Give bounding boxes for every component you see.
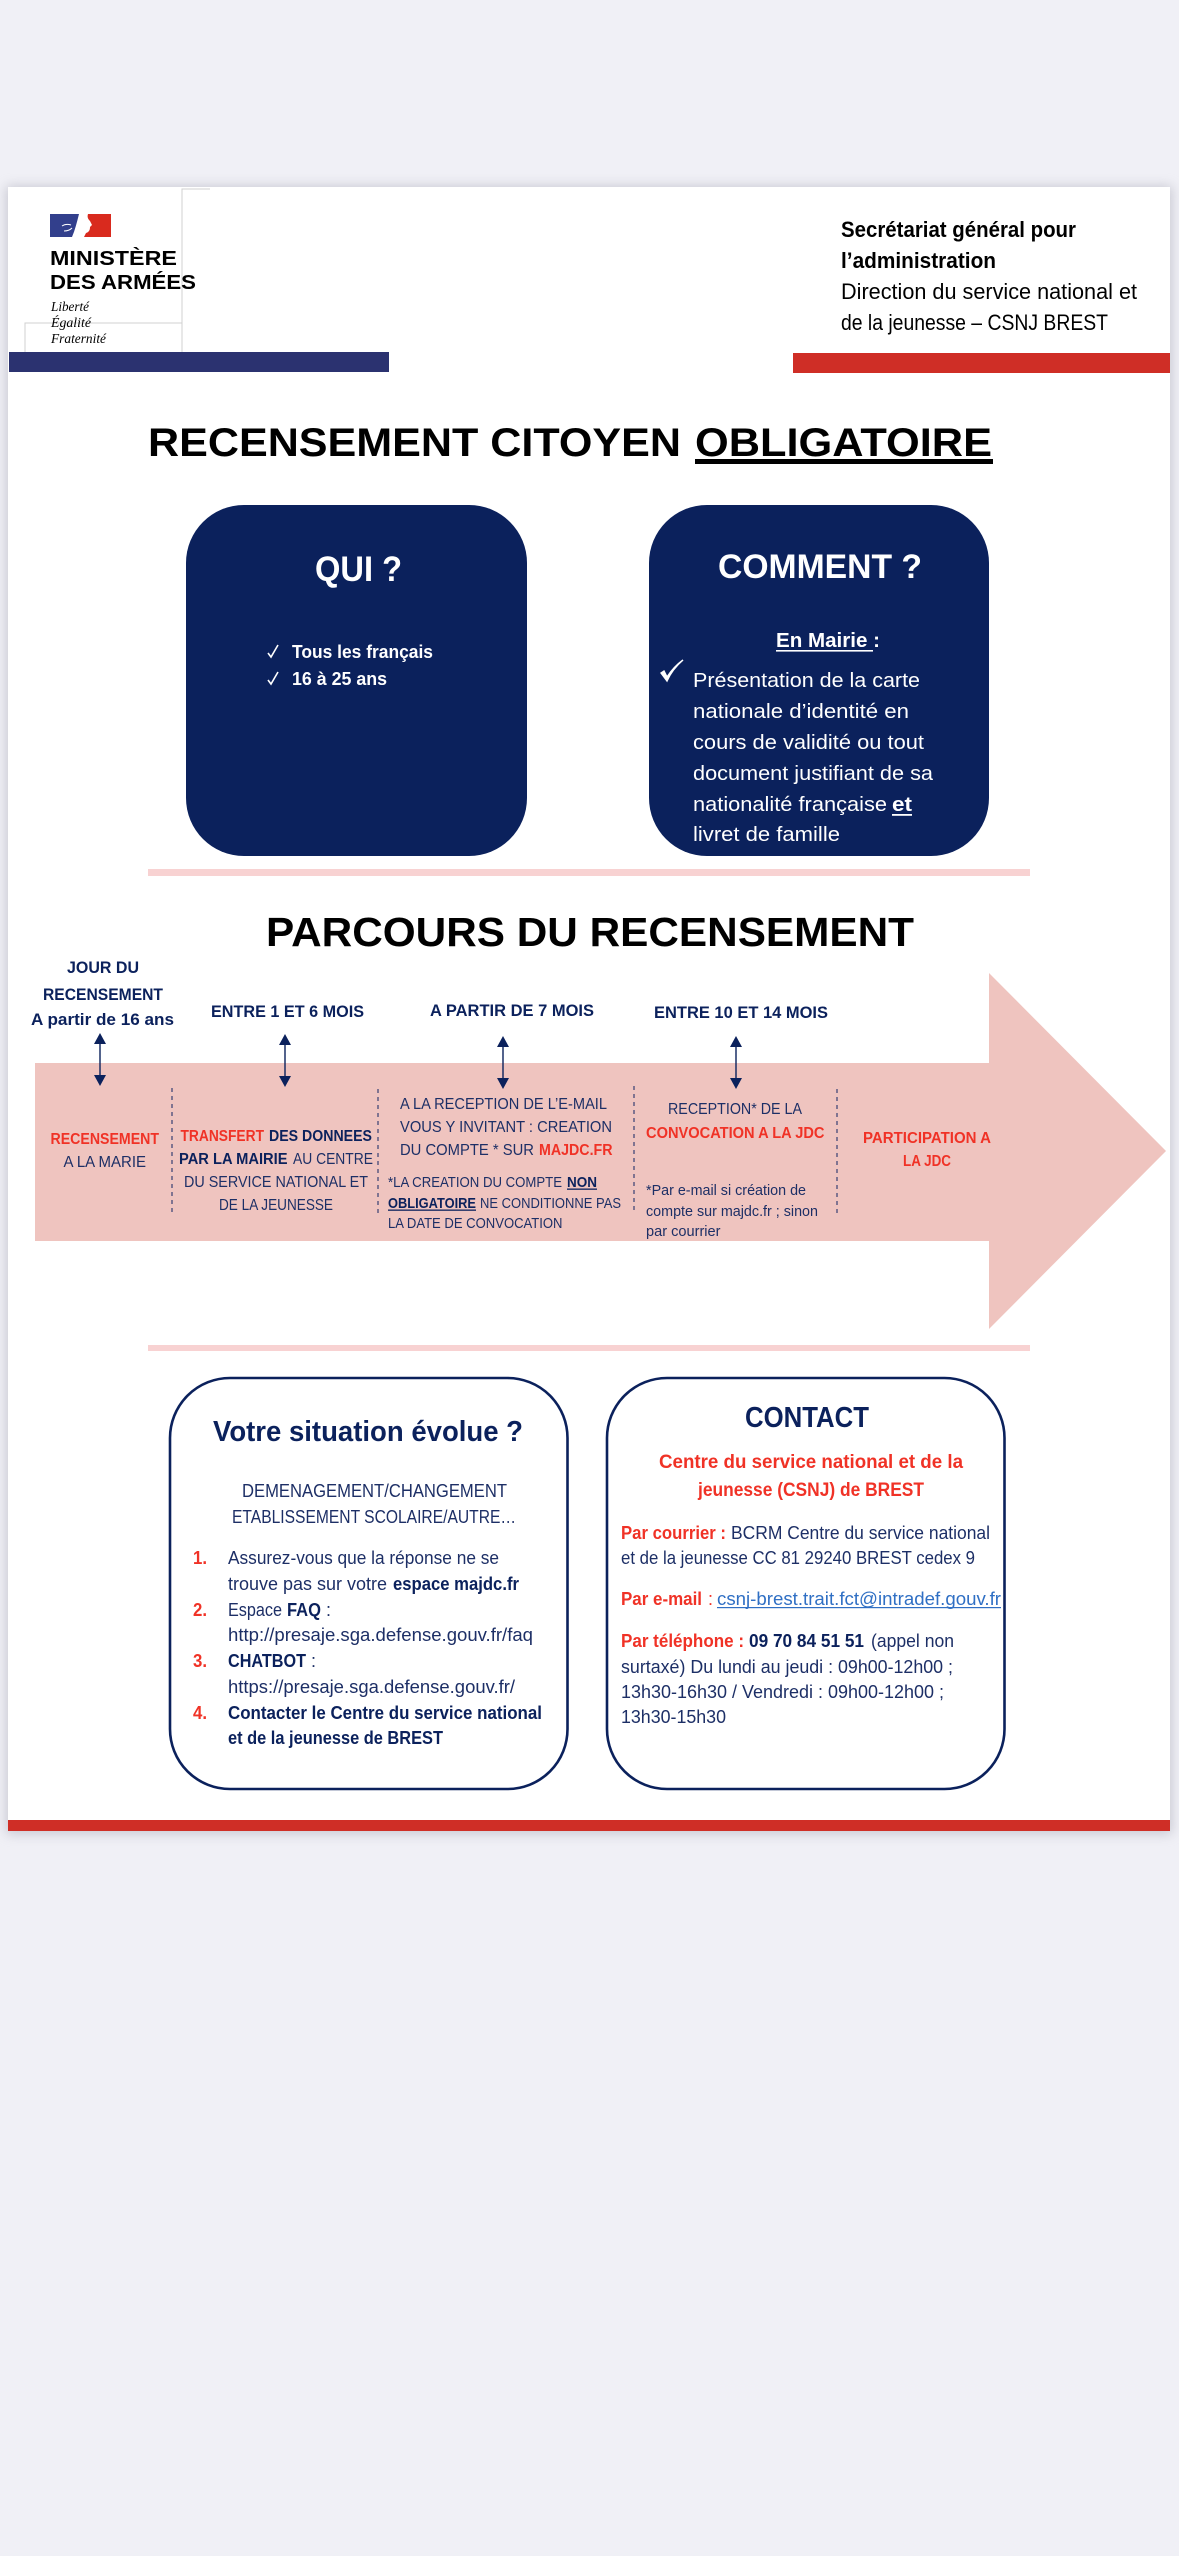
logo: Ministère des Armées bbox=[50, 214, 196, 347]
step 4: reception de la convocation: *Par e-mail si création de bbox=[646, 1182, 806, 1199]
text: par telephone bbox=[621, 1631, 954, 1727]
logo: Ministère des Armées: Égalité bbox=[50, 314, 92, 331]
header text: issuing service: Direction du service national et bbox=[841, 279, 1137, 304]
list: steps: https://presaje.sga.defense.gouv.fr/ bbox=[228, 1677, 515, 1697]
double arrow 3 bbox=[497, 1036, 509, 1089]
header bar: red bbox=[793, 353, 1170, 373]
step 4: reception de la convocation: CONVOCATION A LA JDC bbox=[646, 1125, 825, 1142]
timeline label: entre 10 et 14 mois: ENTRE 10 ET 14 MOIS bbox=[654, 1003, 828, 1022]
step 3: creation du compte bbox=[388, 1096, 621, 1232]
step 3: creation du compte: *LA CREATION DU COMPTE bbox=[388, 1174, 562, 1191]
timeline label: jour du recensement: A partir de 16 ans bbox=[31, 1010, 174, 1029]
text: required documents: et bbox=[892, 794, 912, 816]
list: steps: espace majdc.fr bbox=[393, 1574, 519, 1594]
heading: COMMENT: COMMENT ? bbox=[718, 548, 922, 586]
header text: issuing service bbox=[841, 217, 1137, 335]
panel: contact bbox=[607, 1378, 1004, 1789]
list: who: 16 à 25 ans bbox=[292, 669, 387, 689]
footer bar: red bbox=[8, 1820, 1170, 1831]
text: required documents: Présentation de la carte bbox=[693, 670, 920, 692]
panel: COMMENT bbox=[649, 505, 989, 856]
step 2: transfert des donnees bbox=[179, 1128, 373, 1214]
step 2: transfert des donnees: DES DONNEES bbox=[269, 1128, 372, 1145]
timeline label: a partir de 7 mois: A PARTIR DE 7 MOIS bbox=[430, 1001, 594, 1020]
step 4: reception de la convocation: par courrier bbox=[646, 1223, 720, 1240]
subheading: CSNJ de Brest: Centre du service national et de la bbox=[659, 1452, 963, 1473]
step 3: creation du compte: DU COMPTE * SUR bbox=[400, 1142, 534, 1159]
step 2: transfert des donnees: TRANSFERT bbox=[180, 1128, 264, 1145]
list: steps: Contacter le Centre du service national bbox=[228, 1703, 542, 1723]
text: situations: DEMENAGEMENT/CHANGEMENT bbox=[242, 1481, 507, 1501]
text: par courrier: BCRM Centre du service national bbox=[731, 1523, 990, 1543]
list: steps: 2. bbox=[193, 1600, 207, 1620]
title: OBLIGATOIRE bbox=[695, 421, 992, 465]
text: required documents: nationale d’identité en bbox=[693, 701, 909, 723]
step 5: participation a la JDC bbox=[863, 1130, 991, 1170]
step 3: creation du compte: NON bbox=[567, 1174, 597, 1191]
heading: votre situation evolue: Votre situation évolue ? bbox=[213, 1416, 523, 1448]
step 4: reception de la convocation: compte sur majdc.fr ; sinon bbox=[646, 1203, 818, 1220]
text: par telephone: 09 70 84 51 51 bbox=[749, 1631, 864, 1651]
text: par telephone: 13h30-15h30 bbox=[621, 1707, 726, 1727]
list: who: Tous les français bbox=[292, 642, 433, 662]
step 3: creation du compte: OBLIGATOIRE bbox=[388, 1195, 476, 1212]
list: steps: trouve pas sur votre bbox=[228, 1574, 387, 1594]
text: par telephone: surtaxé) Du lundi au jeudi : 09h00-12h00 ; bbox=[621, 1657, 953, 1677]
logo: Ministère des Armées: Liberté bbox=[50, 300, 90, 315]
text: par e-mail: Par e-mail bbox=[621, 1589, 702, 1609]
double arrow 2 bbox=[279, 1034, 291, 1087]
step 2: transfert des donnees: AU CENTRE bbox=[293, 1151, 373, 1168]
step 3: creation du compte: LA DATE DE CONVOCATION bbox=[388, 1215, 562, 1232]
step 1: recensement bbox=[50, 1131, 159, 1171]
heading: contact: CONTACT bbox=[745, 1402, 869, 1434]
arrow: timeline background bbox=[35, 973, 1166, 1329]
heading: Parcours du recensement: PARCOURS DU RECENSEMENT bbox=[266, 909, 914, 955]
list: steps: CHATBOT bbox=[228, 1651, 306, 1671]
logo: Ministère des Armées: Fraternité bbox=[50, 332, 107, 347]
list: steps: 4. bbox=[193, 1703, 207, 1723]
text: required documents: livret de famille bbox=[693, 824, 840, 846]
title: RECENSEMENT CITOYEN bbox=[148, 421, 681, 465]
list: steps bbox=[193, 1548, 542, 1748]
list: who bbox=[268, 642, 433, 689]
double arrow 1 bbox=[94, 1033, 106, 1086]
text: required documents: nationalité française bbox=[693, 794, 887, 816]
step 3: creation du compte: NE CONDITIONNE PAS bbox=[480, 1195, 621, 1212]
step 4: reception de la convocation bbox=[646, 1101, 825, 1240]
heading: QUI: QUI ? bbox=[315, 550, 402, 589]
double arrow 4 bbox=[730, 1036, 742, 1089]
text: par courrier: et de la jeunesse CC 81 29240 BREST cedex 9 bbox=[621, 1548, 975, 1568]
step 1: recensement: A LA MARIE bbox=[64, 1154, 146, 1171]
text: par e-mail: : bbox=[708, 1589, 713, 1609]
header bar: blue bbox=[9, 352, 389, 372]
text: situations: ETABLISSEMENT SCOLAIRE/AUTRE… bbox=[232, 1507, 516, 1527]
step 2: transfert des donnees: DE LA JEUNESSE bbox=[219, 1197, 333, 1214]
list: steps: et de la jeunesse de BREST bbox=[228, 1728, 443, 1748]
step 3: creation du compte: MAJDC.FR bbox=[539, 1142, 613, 1159]
text: par courrier: Par courrier : bbox=[621, 1523, 726, 1543]
step 3: creation du compte: VOUS Y INVITANT : CREATION bbox=[400, 1119, 612, 1136]
text: par telephone: 13h30-16h30 / Vendredi : 09h00-12h00 ; bbox=[621, 1682, 944, 1702]
text: par courrier bbox=[621, 1523, 990, 1568]
step 5: participation a la JDC: PARTICIPATION A bbox=[863, 1130, 991, 1147]
subheading: En Mairie: En Mairie : bbox=[776, 630, 880, 652]
header text: issuing service: de la jeunesse – CSNJ BREST bbox=[841, 310, 1108, 335]
header text: issuing service: Secrétariat général pour bbox=[841, 217, 1076, 242]
text: required documents bbox=[693, 670, 934, 846]
title bbox=[148, 421, 993, 465]
text: par e-mail: csnj-brest.trait.fct@intradef.gouv.fr bbox=[717, 1589, 1001, 1609]
panel: QUI bbox=[186, 505, 527, 856]
list: steps: Espace bbox=[228, 1600, 282, 1620]
text: situations bbox=[232, 1481, 516, 1527]
icon: check mark bbox=[661, 660, 683, 681]
subheading: CSNJ de Brest: jeunesse (CSNJ) de BREST bbox=[697, 1480, 924, 1501]
step 5: participation a la JDC: LA JDC bbox=[903, 1153, 951, 1170]
list: steps: : bbox=[326, 1600, 331, 1620]
icon: French flag with Marianne bbox=[50, 214, 111, 237]
logo: Ministère des Armées: DES ARMÉES bbox=[50, 271, 196, 294]
step 2: transfert des donnees: PAR LA MAIRIE bbox=[179, 1151, 288, 1168]
text: par telephone: (appel non bbox=[871, 1631, 954, 1651]
subheading: CSNJ de Brest bbox=[659, 1452, 963, 1501]
panel: votre situation evolue bbox=[170, 1378, 568, 1789]
list: steps: : bbox=[311, 1651, 316, 1671]
list: steps: Assurez-vous que la réponse ne se bbox=[228, 1548, 499, 1568]
header text: issuing service: l’administration bbox=[841, 248, 996, 273]
logo: Ministère des Armées: MINISTÈRE bbox=[50, 247, 177, 270]
step 4: reception de la convocation: RECEPTION* DE LA bbox=[668, 1101, 802, 1118]
list: steps: http://presaje.sga.defense.gouv.fr/faq bbox=[228, 1625, 533, 1645]
list: steps: 1. bbox=[193, 1548, 207, 1568]
list: steps: FAQ bbox=[287, 1600, 321, 1620]
step 1: recensement: RECENSEMENT bbox=[50, 1131, 159, 1148]
text: par telephone: Par téléphone : bbox=[621, 1631, 744, 1651]
text: required documents: document justifiant de sa bbox=[693, 763, 934, 785]
document sheet bbox=[8, 187, 1170, 1831]
timeline label: jour du recensement bbox=[31, 958, 174, 1029]
timeline label: jour du recensement: JOUR DU bbox=[67, 958, 139, 977]
timeline label: jour du recensement: RECENSEMENT bbox=[43, 985, 164, 1004]
step 3: creation du compte: A LA RECEPTION DE L’E-MAIL bbox=[400, 1096, 607, 1113]
step 2: transfert des donnees: DU SERVICE NATIONAL ET bbox=[184, 1174, 368, 1191]
list: steps: 3. bbox=[193, 1651, 207, 1671]
text: required documents: cours de validité ou tout bbox=[693, 732, 924, 754]
timeline label: entre 1 et 6 mois: ENTRE 1 ET 6 MOIS bbox=[211, 1002, 364, 1021]
